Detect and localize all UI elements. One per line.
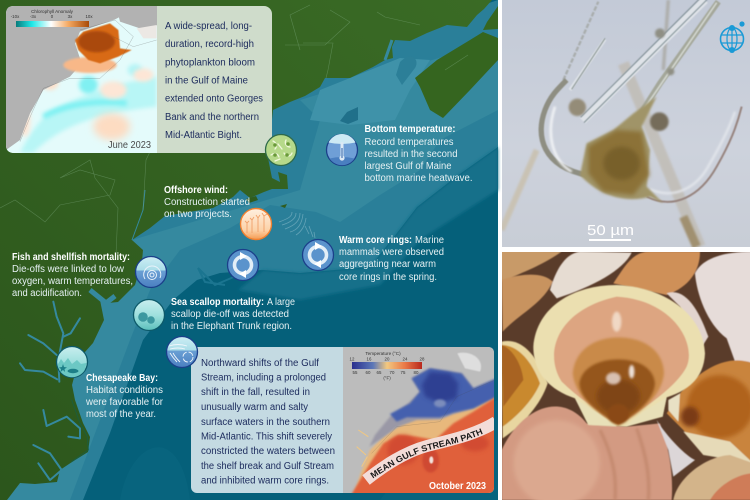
Gulf Stream description: and inhibited warm core rings. [201, 476, 329, 486]
icon: offshore wind turbines [240, 208, 272, 240]
panel: June 2023 phytoplankton bloom [0, 0, 272, 157]
text: Chesapeake Bay: Chesapeake Bay: [86, 373, 158, 384]
temperature legend: 28 [420, 356, 425, 362]
icon: sea scallop [134, 300, 164, 330]
central scallop shell [533, 285, 705, 427]
text: sea scallop mortality: Sea scallop mortality: [171, 297, 264, 308]
text: Chesapeake Bay [85, 373, 164, 420]
temperature legend: 16 [367, 356, 372, 362]
text: offshore wind [164, 185, 250, 220]
icon: warm core ring, west [228, 250, 258, 280]
temperature legend: 80 [414, 370, 419, 375]
temperature legend [350, 351, 425, 380]
text: warm core rings: Warm core rings: [339, 235, 412, 246]
wind lease areas [279, 212, 315, 238]
icon: Chesapeake Bay habitat [56, 346, 88, 378]
Gulf Stream description: unusually warm and salty [201, 402, 308, 413]
bloom description: A wide-spread, long- [165, 21, 252, 32]
bloom description: duration, record-high [165, 39, 254, 50]
temperature legend: 70 [390, 370, 395, 375]
chlorophyll legend: -3x [30, 14, 37, 19]
temperature legend: 75 [401, 370, 406, 375]
temperature legend: Temperature (°C) [365, 351, 401, 356]
bays and sounds [20, 302, 88, 480]
text: fish and shellfish mortality: and acidification. [12, 288, 82, 299]
text: warm core rings: core rings in the spring. [339, 272, 437, 283]
photo: dinoflagellate micrograph [502, 0, 750, 247]
text: bottom temperature: Bottom temperature: [364, 124, 456, 135]
scale bar: 50 micrometres: 50 µm [587, 222, 634, 239]
map of the Northeast Shelf [0, 0, 498, 500]
text: bottom temperature: largest Gulf of Maine [364, 161, 452, 172]
text: offshore wind: on two projects. [164, 209, 232, 220]
text: offshore wind: Construction started [164, 197, 250, 208]
Gulf Stream description [201, 358, 335, 486]
text: sea scallop mortality: scallop die-off was detected [171, 309, 289, 320]
chlorophyll legend [11, 9, 93, 27]
land [0, 0, 492, 500]
sea temperature map [340, 347, 498, 497]
Gulf Stream path label: MEAN GULF STREAM PATH [370, 428, 483, 478]
temperature legend: 24 [403, 356, 408, 362]
bloom description: Mid-Atlantic Bight. [165, 130, 242, 141]
Gulf Stream description: surface waters in the southern [201, 417, 330, 428]
bloom description: phytoplankton bloom [165, 58, 255, 68]
date label: June 2023: June 2023 [108, 140, 151, 151]
surrounding shells [500, 250, 750, 500]
icon: blue globe logo [720, 21, 745, 53]
Gulf Stream description: shift in the fall, resulted in [201, 387, 310, 398]
text: fish and shellfish mortality [12, 252, 133, 299]
temperature legend: 20 [385, 356, 390, 362]
bloom description: Bank and the northern [165, 112, 259, 123]
text: Chesapeake Bay: most of the year. [86, 409, 156, 420]
bloom description [165, 21, 263, 141]
date label: October 2023: October 2023 [429, 481, 486, 492]
text: Chesapeake Bay: were favorable for [85, 397, 164, 408]
photo: sea scallop shells [500, 250, 750, 500]
bloom description: in the Gulf of Maine [165, 76, 248, 86]
text: bottom temperature: resulted in the second [364, 149, 458, 160]
text: sea scallop mortality: A large [267, 297, 295, 308]
text: fish and shellfish mortality: Fish and shellfish mortality: [12, 252, 130, 263]
text: sea scallop mortality [171, 297, 295, 332]
text: warm core rings: Marine [415, 235, 444, 246]
panel: October 2023 Gulf Stream [191, 347, 494, 493]
bloom description: extended onto Georges [165, 94, 263, 104]
chlorophyll legend: -10x [11, 14, 20, 19]
text: warm core rings [339, 235, 444, 283]
Gulf Stream description: Stream, including a prolonged [201, 372, 326, 384]
text: Chesapeake Bay: Habitat conditions [86, 385, 163, 396]
temperature legend: 60 [366, 370, 371, 375]
text: warm core rings: mammals were observed [339, 247, 444, 258]
state borders [0, 5, 468, 255]
icon: Gulf Stream currents [166, 336, 198, 368]
Gulf Stream description: Northward shifts of the Gulf [201, 358, 319, 369]
Gulf Stream description: the shelf break and Gulf Stream [201, 461, 334, 472]
temperature legend: 12 [350, 356, 355, 362]
text: sea scallop mortality: in the Elephant Trunk region. [171, 321, 292, 332]
icon: phytoplankton [266, 134, 296, 166]
temperature legend: (°F) [383, 376, 391, 380]
temperature legend: 65 [377, 370, 382, 375]
Gulf Stream description: constricted the waters between [201, 446, 335, 457]
icon: thermometer [326, 134, 358, 166]
icon: warm core ring, east [302, 240, 334, 270]
chlorophyll anomaly map [6, 6, 157, 153]
text: offshore wind: Offshore wind: [164, 185, 228, 196]
mid shelf water [0, 0, 498, 500]
chlorophyll legend: Chlorophyll Anomaly [31, 9, 74, 14]
text: bottom temperature: Record temperatures [364, 137, 454, 148]
Gulf Stream description: Mid-Atlantic. This shift severely [201, 432, 332, 442]
text: warm core rings: aggregating near warm [339, 259, 436, 270]
temperature legend: 55 [353, 370, 358, 375]
icon: fish and shellfish [136, 256, 166, 288]
text: bottom temperature: bottom marine heatwave. [364, 173, 472, 184]
chlorophyll legend: 10x [85, 14, 93, 19]
text: fish and shellfish mortality: Die-offs were linked to low [12, 264, 125, 275]
text: fish and shellfish mortality: oxygen, warm temperatures, [12, 276, 133, 287]
text: bottom temperature [364, 124, 472, 184]
chlorophyll legend: 0 [51, 14, 54, 19]
chlorophyll legend: 3x [68, 14, 73, 19]
